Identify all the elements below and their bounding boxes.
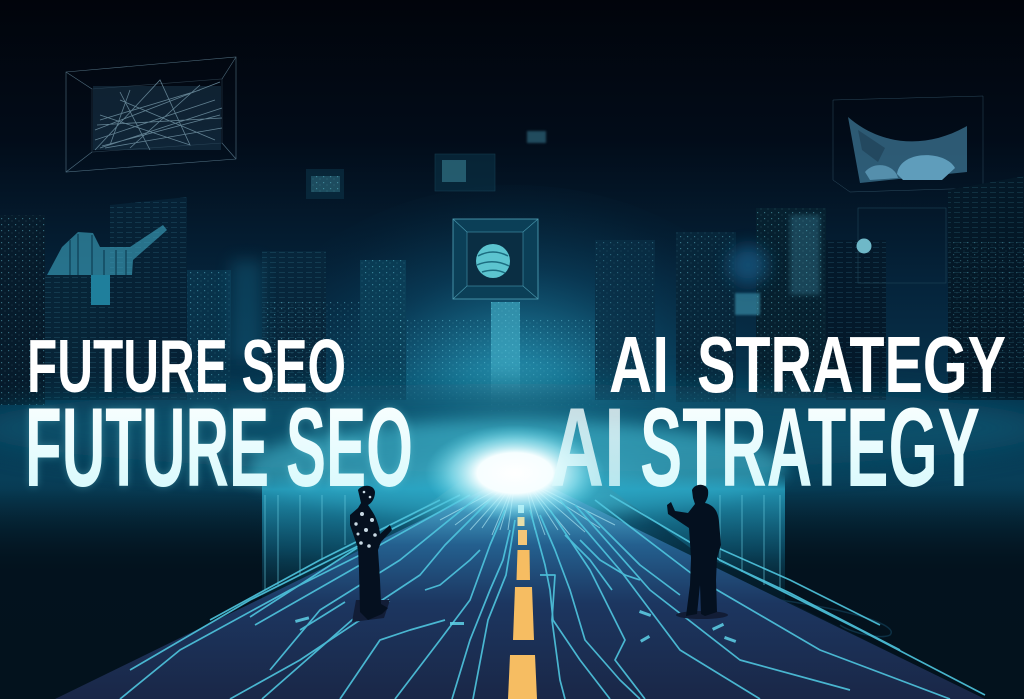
wireframe panel: top right <box>833 96 983 192</box>
lower glow band <box>0 384 1024 516</box>
center lane dashes <box>508 505 537 699</box>
small data panels <box>306 131 546 199</box>
figure: right person <box>667 485 728 619</box>
horizon light <box>425 425 605 521</box>
trace highlights <box>295 599 736 643</box>
city skyline: left <box>0 197 490 405</box>
central glow <box>215 185 815 695</box>
heading: Future SEO large: FUTURE SEO <box>25 385 413 510</box>
side hologram towers <box>262 474 785 600</box>
chart hologram <box>47 225 167 305</box>
heading: AI Strategy small: AI <box>609 320 669 409</box>
dark ground sides <box>0 478 1024 699</box>
central tower with globe panel <box>453 219 600 412</box>
heading: AI Strategy large: AI <box>550 385 625 510</box>
horizon rays <box>440 480 615 535</box>
wireframe panel: top left <box>66 57 236 172</box>
road <box>55 472 985 699</box>
city skyline: right <box>595 176 1024 402</box>
heading glow left: FUTURE SEO <box>25 385 413 510</box>
heading: Future SEO small: FUTURE SEO <box>27 324 346 408</box>
figure: left person <box>350 486 392 622</box>
circuit traces on road <box>120 495 985 699</box>
